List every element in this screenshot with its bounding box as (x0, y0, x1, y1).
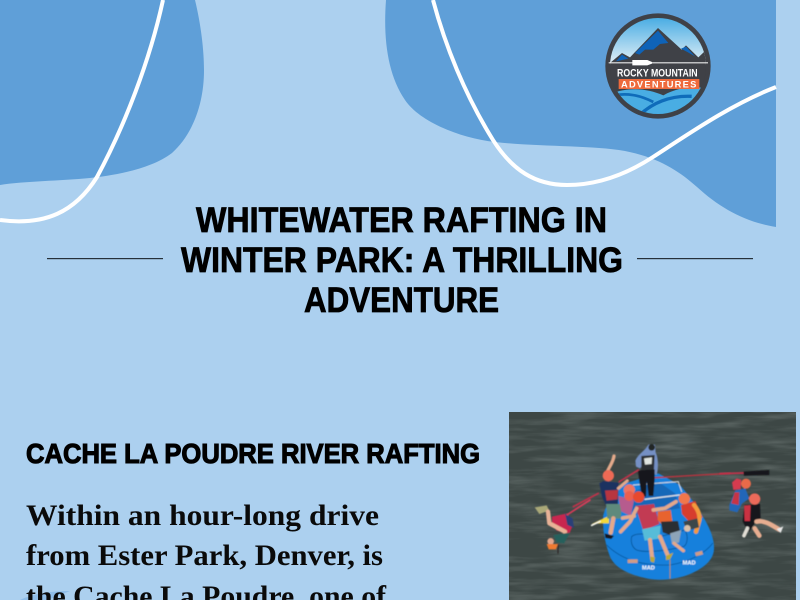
title rule: left (47, 258, 163, 259)
back-left rafter (607, 456, 614, 472)
raft: MAD (642, 565, 655, 571)
logo: Rocky Mountain Adventures (605, 13, 711, 121)
section heading: CACHE LA POUDRE RIVER RAFTING (26, 438, 480, 469)
white curve: right (433, 0, 776, 185)
title: WHITEWATER RAFTING IN (196, 201, 607, 240)
body text: Within an hour-long drive (26, 499, 379, 532)
blob: top right (385, 0, 776, 227)
swimmer left (535, 500, 590, 553)
body text (26, 499, 387, 600)
middle back rafters (618, 496, 634, 516)
swimmers right (720, 470, 783, 536)
raft: MAD (683, 561, 696, 567)
blob: top left (0, 0, 204, 185)
raft crew scene (573, 444, 730, 580)
front small rafter (658, 510, 672, 528)
title (181, 201, 623, 320)
title: ADVENTURE (304, 281, 499, 320)
title: WINTER PARK: A THRILLING (181, 241, 623, 280)
rafters on boat (599, 456, 703, 563)
center rafter (635, 504, 659, 531)
body text: from Ester Park, Denver, is (26, 539, 383, 572)
raft (603, 473, 714, 580)
photo: raft on river (509, 412, 796, 600)
logo: Rocky Mountain Adventures: ADVENTURES (621, 79, 696, 89)
orange helmet rafter (681, 501, 703, 523)
oars (573, 470, 730, 525)
logo: Rocky Mountain Adventures: ROCKY MOUNTAIN (617, 68, 698, 80)
title rule: right (637, 258, 753, 259)
small blob behind body text (20, 591, 70, 600)
white curve: left (0, 0, 163, 221)
guide standing (635, 444, 658, 497)
